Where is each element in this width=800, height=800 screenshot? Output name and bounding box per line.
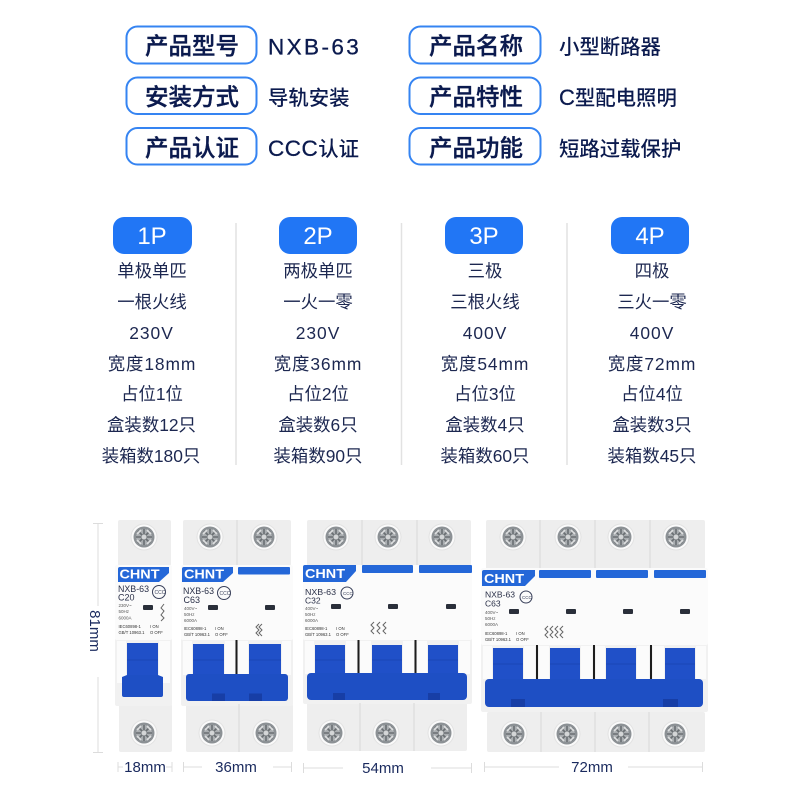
text: 2P specs: 一火一零 [283, 292, 353, 312]
image: 4P breaker: C63 [485, 598, 501, 608]
text: 4P specs: 盒装数3只 [612, 415, 692, 435]
panel: 4P column [608, 217, 696, 466]
image: 3P breaker: IEC60898-1 [305, 626, 328, 631]
image: 3P breaker: GB/T 10963.1 [305, 632, 332, 637]
image: 4P breaker: NXB-63 [485, 590, 515, 600]
text: 3P specs: 宽度54mm [441, 354, 529, 374]
image: 1P breaker [115, 520, 172, 752]
image: 3P breaker: CHNT [305, 567, 345, 581]
dimension: 36mm width: 36mm [215, 759, 257, 776]
image: 2P breaker: 50Hz [184, 612, 195, 617]
badge: 4P [611, 217, 689, 254]
spec: 安装方式 [126, 78, 350, 114]
text: 3P specs: 盒装数4只 [445, 415, 525, 435]
spec: 产品功能: 产品功能 [429, 135, 523, 161]
image: 2P breaker: NXB-63 [183, 586, 214, 596]
image: 1P breaker: 230V~ [118, 603, 132, 608]
text: 4P specs: 四极 [635, 261, 669, 281]
image: 4P breaker: 400V~ [485, 610, 499, 615]
panel: 2P column [274, 217, 362, 466]
spec: 产品特性: 产品特性 [429, 84, 523, 110]
spec: 产品功能: 短路过载保护 [559, 138, 681, 161]
panel: 3P column [441, 217, 529, 466]
image: 1P breaker: C20 [118, 592, 135, 602]
dimension: 18mm width: 18mm [124, 759, 166, 776]
spec: 产品认证: 产品认证 [145, 135, 239, 161]
image: 2P breaker: 6000A [184, 618, 197, 623]
text: 1P specs: 230V [129, 323, 174, 343]
text: 3P specs: 占位3位 [454, 384, 516, 404]
image: 1P breaker: 50Hz [118, 609, 130, 614]
image: 3P breaker: CCC [343, 591, 353, 596]
image: 4P breaker: 50Hz [485, 616, 496, 621]
image: 1P breaker: CHNT [120, 568, 160, 582]
image: 3P breaker: NXB-63 [305, 587, 336, 597]
panel: 1P column [102, 217, 200, 466]
badge: 4P: 4P [635, 223, 665, 250]
image: 3P breaker [303, 520, 472, 751]
badge: 2P [279, 217, 357, 254]
image: 2P breaker: I ON [215, 626, 224, 631]
badge: 1P: 1P [137, 223, 167, 250]
image: 2P breaker: 400V~ [184, 606, 198, 611]
spec: 产品名称: 产品名称 [429, 33, 523, 59]
spec: 产品型号: NXB-63 [268, 34, 361, 60]
panel: product specs [126, 26, 681, 164]
spec: 安装方式: 导轨安装 [268, 87, 350, 110]
image: 4P breaker [481, 520, 708, 752]
badge: 3P: 3P [469, 223, 499, 250]
badge: 2P: 2P [303, 223, 333, 250]
image: 1P breaker: NXB-63 [118, 584, 149, 594]
dimension: 54mm width: 54mm [362, 760, 404, 777]
spec: 安装方式: 安装方式 [145, 84, 239, 110]
image: 4P breaker: CHNT [484, 572, 524, 586]
image: 1P breaker: O OFF [150, 630, 163, 635]
text: 4P specs: 占位4位 [621, 384, 683, 404]
text: 3P specs [441, 261, 529, 466]
text: 4P specs: 装箱数45只 [608, 446, 696, 466]
image: 2P breaker [181, 520, 293, 752]
image: 4P breaker: O OFF [516, 637, 529, 642]
image: 2P breaker: CCC [220, 591, 231, 597]
text: 1P specs: 一根火线 [117, 292, 187, 312]
image: 4P breaker: 6000A [485, 622, 498, 627]
text: 3P specs: 400V [463, 323, 507, 343]
image: 2P breaker: C63 [184, 595, 200, 605]
image: 3P breaker: 400V~ [305, 606, 319, 611]
spec: 产品名称: 小型断路器 [559, 36, 661, 59]
dimension: 72mm width [484, 759, 702, 776]
image: 1P breaker: I ON [150, 624, 159, 629]
text: 1P specs: 单极单匹 [117, 261, 187, 281]
text: 3P specs: 三极 [468, 261, 502, 281]
dimension: 54mm width [304, 760, 472, 777]
image: 2P breaker: CHNT [184, 568, 224, 582]
text: 2P specs: 两极单匹 [283, 261, 353, 281]
image: 2P breaker: O OFF [215, 632, 228, 637]
image: 3P breaker: C32 [305, 596, 321, 606]
text: 1P specs [102, 261, 200, 466]
dimension: 36mm width [184, 759, 292, 776]
spec: 产品功能 [410, 128, 681, 164]
spec: 产品特性: C型配电照明 [559, 85, 677, 110]
image: 3P breaker: I ON [336, 626, 345, 631]
image: 3P breaker: O OFF [336, 632, 349, 637]
dimension: 81mm height [86, 524, 103, 752]
image: 3P breaker: 6000A [305, 618, 318, 623]
badge: 1P [113, 217, 192, 254]
image: 2P breaker: IEC60898-1 [184, 626, 207, 631]
text: 2P specs [274, 261, 362, 466]
text: 4P specs [608, 261, 696, 466]
image: 2P breaker: GB/T 10963.1 [184, 632, 211, 637]
text: 2P specs: 盒装数6只 [278, 415, 358, 435]
text: 4P specs: 宽度72mm [608, 354, 696, 374]
text: 1P specs: 装箱数180只 [102, 446, 200, 466]
spec: 产品型号 [126, 26, 361, 64]
text: 4P specs: 三火一零 [617, 292, 687, 312]
dimension: 72mm width: 72mm [571, 759, 613, 776]
text: 1P specs: 宽度18mm [108, 354, 196, 374]
spec: 产品认证 [126, 128, 359, 164]
spec: 产品认证: CCC认证 [268, 136, 359, 161]
image: 4P breaker: GB/T 10963.1 [485, 637, 512, 642]
image: 1P breaker: IEC60898-1 [118, 624, 142, 629]
image: 1P breaker: 6000A [118, 616, 132, 620]
badge: 3P [445, 217, 523, 254]
image: 1P breaker: GB/T 10963.1 [118, 630, 145, 635]
text: 1P specs: 占位1位 [121, 384, 183, 404]
text: 2P specs: 230V [296, 323, 340, 343]
text: 3P specs: 装箱数60只 [441, 446, 529, 466]
image: 1P breaker: CCC [154, 590, 166, 596]
image: 4P breaker: I ON [516, 631, 525, 636]
text: 2P specs: 装箱数90只 [274, 446, 362, 466]
text: 3P specs: 三根火线 [450, 292, 520, 312]
spec: 产品特性 [410, 78, 677, 114]
image: 3P breaker: 50Hz [305, 612, 316, 617]
spec: 产品名称 [410, 26, 661, 64]
image: 4P breaker: CCC [522, 595, 532, 600]
text: 1P specs: 盒装数12只 [107, 415, 196, 435]
dimension: 81mm height: 81mm [86, 610, 103, 652]
spec: 产品型号: 产品型号 [145, 33, 239, 59]
image: 4P breaker: IEC60898-1 [485, 631, 508, 636]
text: 2P specs: 占位2位 [287, 384, 349, 404]
text: 4P specs: 400V [630, 323, 674, 343]
text: 2P specs: 宽度36mm [274, 354, 362, 374]
